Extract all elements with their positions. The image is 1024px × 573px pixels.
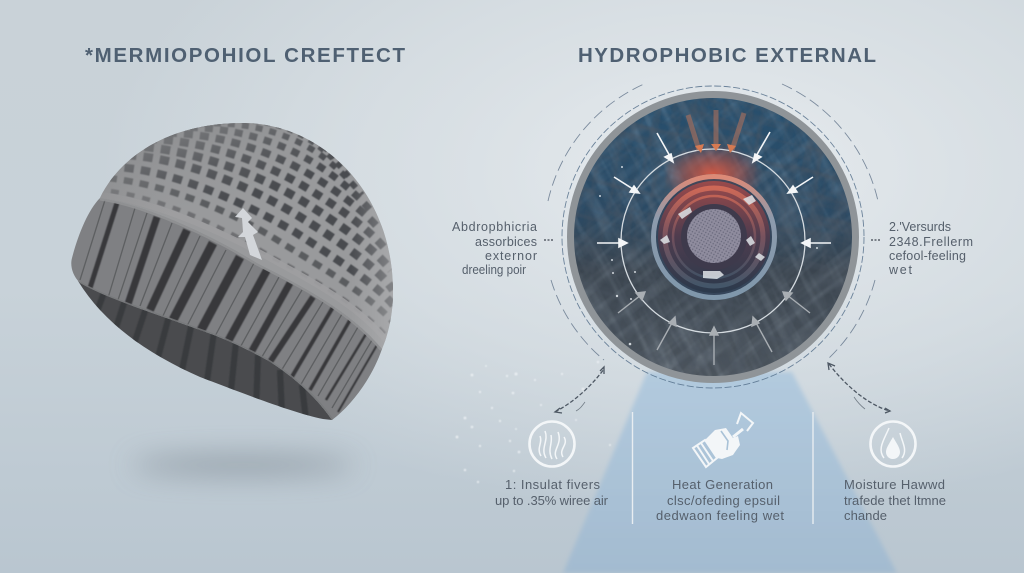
hat shadow xyxy=(131,456,355,474)
left callout text: dreeling poir xyxy=(462,263,526,277)
hat crown with waffle knit xyxy=(100,123,393,349)
hat white arrow mark xyxy=(235,208,262,260)
left callout text: Abdropbhicria xyxy=(452,220,537,234)
text block: insulation xyxy=(495,477,609,508)
text block: moisture: Moisture Hawwd xyxy=(844,477,945,492)
right callout text: 2.'Versurds xyxy=(889,220,951,234)
white ring xyxy=(621,149,805,333)
inward white arrows xyxy=(597,132,831,247)
orange heat arrows xyxy=(688,110,744,153)
right curved double arrow xyxy=(828,363,890,413)
hat interior xyxy=(78,281,332,420)
title: left: *MERMIOPOHIOL CREFTECT xyxy=(85,44,405,67)
icon: water drop in circle xyxy=(870,422,916,466)
divider right xyxy=(812,412,814,524)
right callout text xyxy=(888,220,973,277)
circle diagram xyxy=(548,84,878,388)
left callout connector xyxy=(544,239,553,241)
right callout text: 2348.Frellerm xyxy=(889,235,973,249)
icon: heat waves in circle xyxy=(530,422,574,466)
text block: insulation: 1: Insulat fivers xyxy=(505,477,600,492)
text block: heat generation: clsc/ofeding epsuil xyxy=(667,493,780,508)
blue light beam under the circle xyxy=(563,372,897,573)
beanie hat xyxy=(65,115,400,430)
right callout text: cefool-feeling xyxy=(889,249,966,263)
text block: heat generation: Heat Generation xyxy=(672,477,773,492)
text block: moisture xyxy=(844,477,946,523)
divider left xyxy=(632,412,634,524)
right callout connector xyxy=(871,239,881,241)
text block: heat generation xyxy=(656,477,784,523)
hat ribbed cuff xyxy=(65,190,390,425)
outer dashed arcs xyxy=(548,84,878,388)
grey ring xyxy=(570,94,856,380)
fibre disc xyxy=(574,98,852,376)
title: right: HYDROPHOBIC EXTERNAL xyxy=(578,44,876,67)
left callout text xyxy=(452,220,537,277)
left callout text: externor xyxy=(485,249,537,263)
right callout text: wet xyxy=(888,263,913,277)
text block: moisture: trafede thet ltmne xyxy=(844,493,946,508)
faded lower arrows xyxy=(618,292,810,365)
central concentric core xyxy=(651,174,777,300)
left callout text: assorbices xyxy=(475,235,537,249)
icon: bottle and brush xyxy=(693,413,753,467)
white sparkles in disc xyxy=(599,166,818,345)
text block: insulation: up to .35% wiree air xyxy=(495,493,609,508)
water particles xyxy=(456,361,611,483)
text block: moisture: chande xyxy=(844,508,887,523)
left curved double arrow xyxy=(555,367,604,413)
text block: heat generation: dedwaon feeling wet xyxy=(656,508,784,523)
